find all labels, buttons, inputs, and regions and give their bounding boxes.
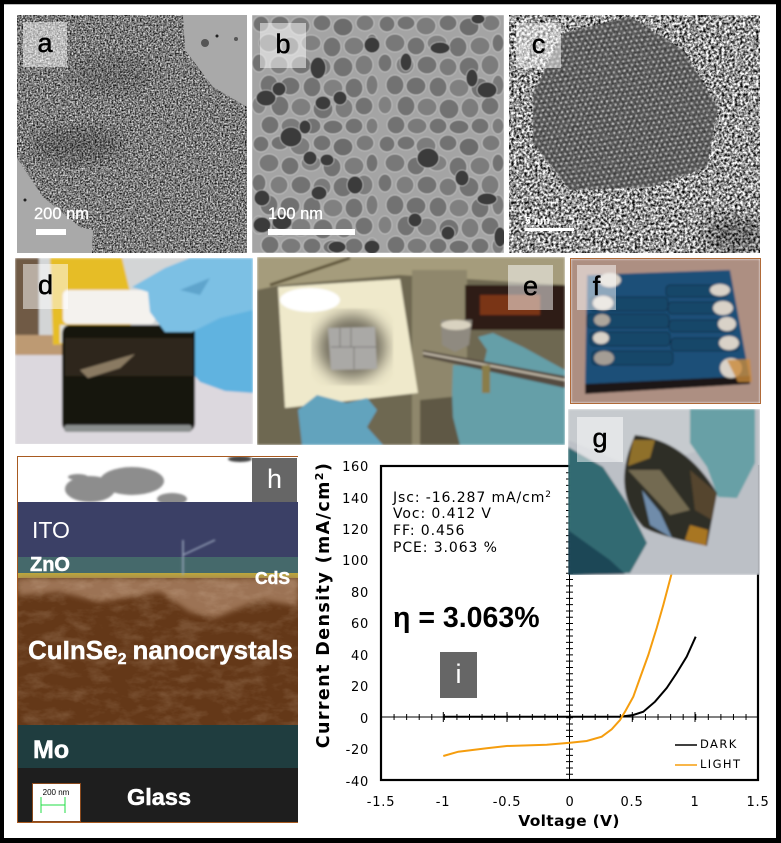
label d bbox=[23, 264, 68, 309]
panel d: photo of nanocrystal ink jar bbox=[15, 258, 253, 444]
dark curve bbox=[443, 637, 696, 717]
y axis labels: 120 bbox=[342, 523, 369, 538]
upper glove bbox=[690, 409, 755, 498]
metal plate bbox=[278, 279, 418, 408]
layer labels bbox=[28, 517, 293, 810]
device parameters text: FF: 0.456 bbox=[393, 523, 465, 539]
legend: DARK bbox=[700, 737, 738, 751]
layer labels: CuInSe bbox=[28, 635, 118, 665]
scale bar: 200 nm bbox=[43, 788, 70, 797]
y axis labels: 100 bbox=[342, 554, 369, 569]
label b bbox=[260, 23, 306, 68]
device parameters text: Voc: 0.412 V bbox=[393, 506, 492, 522]
film sample bbox=[624, 435, 717, 546]
label e: e bbox=[523, 271, 538, 301]
axis ticks bbox=[381, 466, 758, 780]
glove holding plate bbox=[298, 395, 383, 445]
device parameters text: PCE: 3.063 % bbox=[393, 540, 498, 556]
panel i: current density vs voltage chart bbox=[313, 460, 770, 830]
layer labels: ITO bbox=[32, 517, 70, 543]
x axis labels bbox=[367, 795, 770, 810]
label c: c bbox=[532, 29, 545, 59]
legend: LIGHT bbox=[700, 757, 741, 771]
label b: b bbox=[275, 29, 291, 59]
x axis labels: -1 bbox=[436, 795, 450, 810]
y axis labels: 20 bbox=[351, 680, 369, 695]
panel f: photo of device array on glass bbox=[570, 258, 761, 404]
label f bbox=[577, 265, 616, 310]
label c bbox=[516, 23, 561, 68]
scale bar bbox=[32, 784, 80, 822]
x axis labels: 0.5 bbox=[620, 795, 644, 810]
y axis labels: 40 bbox=[351, 649, 369, 664]
layer labels: ZnO bbox=[30, 554, 70, 576]
label h: h bbox=[267, 464, 282, 494]
lower glove bbox=[568, 447, 647, 575]
label i: i bbox=[456, 659, 462, 689]
label g: g bbox=[592, 423, 608, 453]
layer labels: CdS bbox=[255, 568, 290, 588]
legend bbox=[675, 737, 741, 771]
device parameters text: Jsc: -16.287 mA/cm bbox=[393, 490, 545, 506]
panel e: photo of spray coating with airbrush bbox=[257, 257, 565, 445]
x axis labels: -1.5 bbox=[367, 795, 395, 810]
panel c: high resolution TEM lattice: 5 nm bbox=[525, 215, 550, 227]
y axis labels bbox=[342, 460, 369, 790]
y axis labels: 160 bbox=[342, 460, 369, 475]
y axis title: 2 bbox=[313, 471, 326, 480]
device parameters text: 2 bbox=[545, 490, 552, 500]
panel a: low magnification TEM of nanocrystal film: 200 nm bbox=[34, 205, 89, 223]
y axis labels: -20 bbox=[346, 743, 369, 758]
label e bbox=[508, 265, 553, 310]
device parameters text bbox=[392, 490, 552, 556]
layer labels: nanocrystals bbox=[132, 635, 293, 665]
x axis labels: 1.5 bbox=[746, 795, 770, 810]
label h bbox=[252, 458, 297, 502]
x axis labels: -0.5 bbox=[493, 795, 521, 810]
panel b: TEM of nanocrystals bbox=[252, 15, 504, 253]
panel g: photo of flexible device film bbox=[568, 409, 760, 575]
gloved hand with airbrush bbox=[452, 333, 565, 445]
label d: d bbox=[38, 270, 53, 300]
layer labels: Glass bbox=[127, 784, 191, 810]
x axis labels: 0 bbox=[565, 795, 575, 810]
y axis title: ) bbox=[314, 462, 334, 471]
panel b: TEM of nanocrystals: 100 nm bbox=[268, 205, 323, 223]
panel c: high resolution TEM lattice bbox=[509, 15, 760, 253]
label i bbox=[440, 652, 477, 698]
y axis labels: 0 bbox=[360, 712, 369, 727]
label f: f bbox=[593, 271, 600, 301]
y axis labels: 140 bbox=[342, 492, 369, 507]
x axis title: Voltage (V) bbox=[518, 812, 620, 830]
y axis title: Current Density (mA/cm bbox=[314, 480, 334, 748]
layer labels: 2 bbox=[118, 651, 127, 668]
x axis labels: 1 bbox=[690, 795, 700, 810]
label g bbox=[577, 417, 623, 462]
y axis labels: 80 bbox=[351, 586, 369, 601]
panel a: low magnification TEM of nanocrystal film bbox=[17, 15, 247, 253]
efficiency value: η = 3.063% bbox=[393, 602, 540, 634]
panel h: cross section SEM with colored layers bbox=[17, 456, 298, 823]
label a: a bbox=[37, 28, 53, 58]
y axis labels: 60 bbox=[351, 617, 369, 632]
y axis labels: -40 bbox=[346, 775, 369, 790]
layer labels: Mo bbox=[33, 736, 69, 764]
light curve bbox=[443, 573, 672, 756]
label a bbox=[23, 22, 67, 67]
